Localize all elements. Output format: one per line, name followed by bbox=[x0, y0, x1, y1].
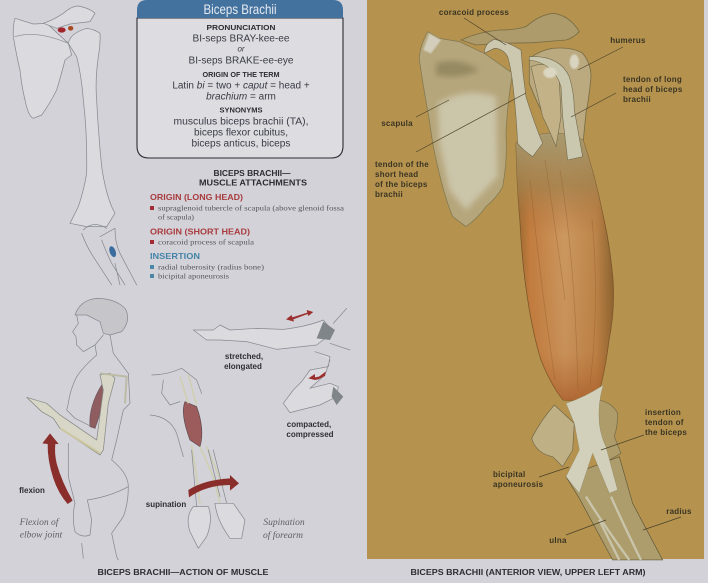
box header: Biceps Brachii bbox=[137, 0, 343, 18]
list: origin long head: of scapula) bbox=[158, 212, 195, 222]
synonyms text: biceps flexor cubitus, bbox=[194, 128, 288, 138]
illustration: arm showing supination of forearm bbox=[150, 368, 245, 548]
list: origin short head: coracoid process of scapula bbox=[158, 238, 255, 246]
pronunciation text: BI-seps BRAKE-ee-eye bbox=[188, 56, 294, 66]
illustration: biceps tendons at shoulder bbox=[484, 39, 583, 160]
label: bicipital aponeurosis: aponeurosis bbox=[493, 480, 544, 489]
origin of the term text: Latin bi = two + caput = head + bbox=[172, 80, 310, 92]
label: tendon of short head: short head bbox=[375, 170, 418, 179]
label: insertion tendon: insertion bbox=[645, 408, 681, 417]
label: flexion: flexion bbox=[19, 486, 45, 495]
list: insertion: bicipital aponeurosis bbox=[158, 272, 229, 280]
label: tendon of short head: brachii bbox=[375, 190, 403, 199]
list: insertion bbox=[150, 251, 265, 280]
icon: insertion mark blue bbox=[108, 245, 117, 258]
arm muscle bbox=[90, 385, 103, 428]
synonyms text bbox=[174, 108, 308, 150]
label: insertion tendon: the biceps bbox=[645, 428, 687, 437]
illustration: woman in profile, flexion of elbow joint bbox=[27, 298, 130, 560]
illustration: skeleton of upper arm with attachment sites bbox=[13, 6, 137, 285]
label: scapula: scapula bbox=[381, 119, 413, 128]
list: origin long head: ORIGIN (LONG HEAD) bbox=[150, 192, 243, 202]
leader lines bbox=[416, 18, 681, 535]
label: tendon of long head: head of biceps bbox=[623, 85, 683, 94]
arrow: supination bbox=[188, 475, 239, 497]
synonyms text: SYNONYMS bbox=[220, 108, 263, 114]
origin of the term text: brachium = arm bbox=[206, 92, 276, 102]
pronunciation text: or bbox=[237, 44, 245, 54]
origin of the term text: ORIGIN OF THE TERM bbox=[202, 72, 280, 79]
illustration: stretched arm bbox=[193, 308, 350, 350]
title: anterior view: BICEPS BRACHII (ANTERIOR VIEW, UPPER LEFT ARM) bbox=[410, 568, 646, 577]
caption: supination of forearm: of forearm bbox=[263, 530, 303, 541]
list: origin long head: supraglenoid tubercle of scapula (above glenoid fossa bbox=[158, 204, 345, 212]
illustration: clavicle and acromion bbox=[461, 13, 579, 45]
panel: anterior view of biceps on tan background bbox=[367, 0, 704, 560]
illustration: humerus head bbox=[529, 48, 591, 147]
list: insertion: INSERTION bbox=[150, 251, 200, 261]
label: tendon of long head: tendon of long bbox=[623, 75, 682, 84]
caption: flexion of elbow joint: elbow joint bbox=[20, 530, 63, 540]
synonyms text: biceps anticus, biceps bbox=[192, 138, 290, 150]
illustration: scapula bbox=[419, 32, 513, 227]
box header: Biceps Brachii: Biceps Brachii bbox=[204, 1, 276, 17]
label: insertion tendon: tendon of bbox=[645, 418, 684, 427]
pronunciation text: PRONUNCIATION bbox=[206, 25, 276, 32]
label: tendon of long head: brachii bbox=[623, 95, 651, 104]
label: compacted, compressed: compacted, bbox=[287, 420, 331, 429]
arrow: stretch bbox=[286, 310, 313, 322]
label: radius: radius bbox=[666, 507, 692, 516]
heading: muscle attachments: BICEPS BRACHII— bbox=[214, 169, 290, 178]
illustration: elbow and forearm bbox=[532, 385, 663, 560]
list: insertion: radial tuberosity (radius bone) bbox=[158, 262, 265, 272]
label: stretched, elongated: elongated bbox=[224, 362, 262, 371]
pronunciation text: BI-seps BRAY-kee-ee bbox=[192, 34, 290, 44]
synonyms text: musculus biceps brachii (TA), bbox=[174, 116, 308, 128]
pronunciation text bbox=[188, 25, 294, 66]
arrow: flexion bbox=[42, 433, 73, 504]
label: coracoid process: coracoid process bbox=[439, 8, 509, 17]
caption: supination of forearm: Supination bbox=[263, 518, 305, 528]
label: ulna: ulna bbox=[549, 536, 567, 545]
label: supination: supination bbox=[146, 500, 186, 509]
hand lower bbox=[73, 487, 128, 536]
panel: pronunciation box bbox=[137, 0, 343, 158]
hands bbox=[188, 507, 210, 548]
list: origin short head bbox=[150, 226, 255, 246]
title: action of muscle: BICEPS BRACHII—ACTION OF MUSCLE bbox=[98, 568, 269, 577]
illustration: compacted arm bbox=[283, 352, 343, 413]
label: bicipital aponeurosis: bicipital bbox=[493, 470, 525, 479]
arrow: compress bbox=[308, 372, 326, 380]
heading: muscle attachments: MUSCLE ATTACHMENTS bbox=[199, 178, 308, 188]
list: origin short head: ORIGIN (SHORT HEAD) bbox=[150, 226, 250, 236]
icon: origin marks red bbox=[58, 26, 73, 33]
heading: muscle attachments bbox=[199, 169, 308, 188]
origin of the term text bbox=[172, 72, 310, 102]
label: humerus: humerus bbox=[610, 36, 646, 45]
list: origin long head bbox=[150, 192, 345, 222]
illustration: muscle belly bbox=[516, 133, 614, 400]
label: tendon of short head: of the biceps bbox=[375, 180, 428, 189]
label: compacted, compressed: compressed bbox=[286, 430, 334, 439]
label: tendon of short head: tendon of the bbox=[375, 160, 429, 169]
caption: flexion of elbow joint: Flexion of bbox=[20, 518, 58, 528]
label: stretched, elongated: stretched, bbox=[225, 352, 263, 361]
